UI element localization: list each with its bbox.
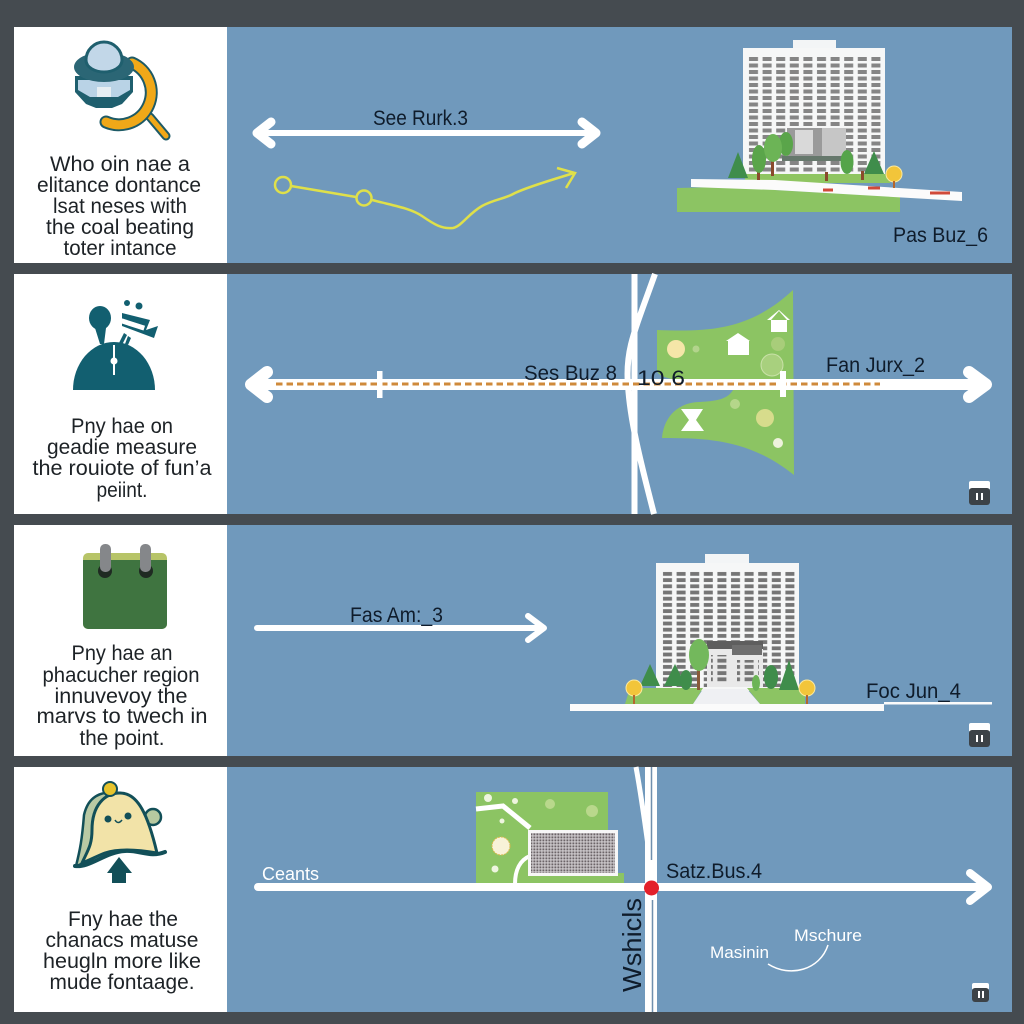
label: destination 1: Pas Buz_6 — [893, 224, 988, 247]
label: vertical road: Wshicls — [617, 898, 647, 992]
icon: small calendar — [969, 723, 990, 747]
row 4 description: Fny hae the — [68, 908, 178, 931]
label: route 2 start: Ses Buz 8 — [524, 362, 617, 385]
icon: green calendar — [83, 544, 167, 629]
label: start: Ceants — [262, 864, 319, 884]
row 1 map area — [227, 27, 1012, 263]
row 2 description: Pny hae on — [71, 415, 173, 438]
measure arc — [768, 945, 828, 971]
row 1 description: elitance dontance — [37, 174, 201, 197]
row 4 description: chanacs matuse — [46, 929, 198, 952]
row 3 text card — [14, 525, 227, 756]
site plan — [476, 792, 624, 884]
row 3 description: Pny hae an — [72, 642, 172, 665]
green park shape — [657, 290, 794, 475]
row 2 text card — [14, 274, 227, 514]
distance label: See Rurk.3 — [373, 107, 468, 130]
icon: small calendar — [969, 481, 990, 505]
row 4 description: heugln more like — [43, 950, 201, 973]
distance arrow — [257, 616, 544, 640]
row 1 description: lsat neses with — [53, 195, 187, 218]
row 3 description: innuvevoy the — [54, 685, 188, 708]
row 4 text card — [14, 767, 227, 1012]
yellow route line — [275, 168, 575, 228]
row 3 description: phacucher region — [42, 664, 200, 687]
marker: red dot — [644, 880, 659, 896]
row 3 map area — [227, 525, 1012, 756]
panel: row 2 — [14, 274, 1012, 514]
main route arrow — [258, 873, 988, 901]
icon: dome with figures — [73, 300, 158, 390]
crossing road lines — [636, 767, 652, 1012]
icon: magnifier with dome device — [74, 42, 166, 136]
row 2 description: the rouiote of fun’a — [32, 457, 212, 480]
row 4 description — [43, 908, 201, 994]
row 2 description: geadie measure — [47, 436, 197, 459]
building illustration 2 — [570, 554, 992, 711]
row 4 description: mude fontaage. — [50, 971, 194, 994]
label: distance value: 10 6 — [637, 367, 685, 390]
row 3 description — [36, 642, 208, 750]
building illustration 1 — [677, 40, 962, 212]
crossing road lines — [627, 274, 655, 514]
row 3 description: the point. — [80, 727, 164, 750]
label: route 4: Satz.Bus.4 — [666, 860, 762, 883]
panel: row 4 — [14, 767, 1012, 1012]
row 2 description — [32, 415, 212, 502]
row 1 description: Who oin nae a — [50, 153, 190, 176]
icon: small calendar — [972, 983, 989, 1002]
panel: row 1 — [14, 27, 1012, 263]
label: route 3: Fas Am:_3 — [350, 604, 443, 627]
label: destination 3: Foc Jun_4 — [866, 680, 961, 703]
row 1 description: toter intance — [64, 237, 176, 260]
row 2 description: peiint. — [96, 479, 148, 502]
icon: smiling bell with arrow — [75, 782, 165, 883]
distance arrow — [257, 122, 596, 144]
label: measure note left: Masinin — [710, 943, 769, 962]
row 1 text card — [14, 27, 227, 263]
row 2 map area — [227, 274, 1012, 514]
row 1 description: the coal beating — [46, 216, 194, 239]
row 4 map area — [227, 767, 1012, 1012]
row 1 description — [37, 153, 201, 260]
panel: row 3 — [14, 525, 1012, 756]
row 3 description: marvs to twech in — [36, 705, 208, 728]
distance arrow with dashes — [251, 371, 986, 398]
label: measure note right: Mschure — [794, 926, 862, 945]
label: route 2 end: Fan Jurx_2 — [826, 354, 925, 377]
